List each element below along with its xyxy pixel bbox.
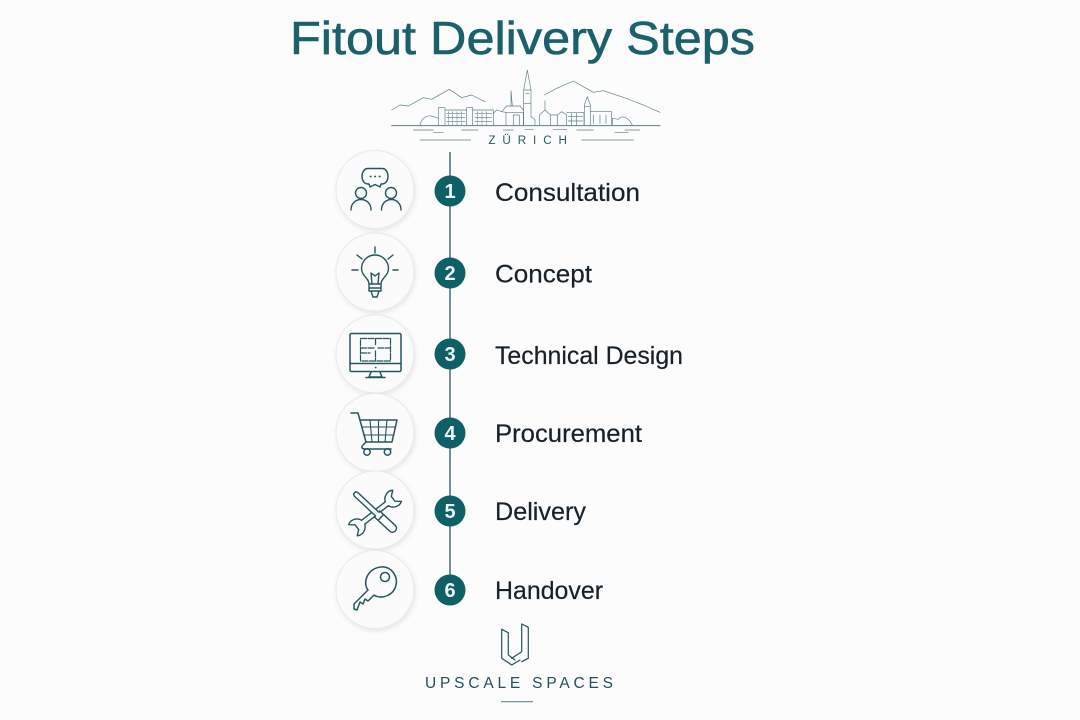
label: Technical Design <box>495 342 683 370</box>
label: Delivery <box>495 498 587 526</box>
number 4 <box>434 418 466 448</box>
label: Consultation <box>495 179 640 207</box>
logo text: UPSCALE SPACES <box>425 675 613 692</box>
number 5: 5 <box>444 501 456 523</box>
number 2 <box>434 258 466 288</box>
number 6: 6 <box>444 580 456 602</box>
number 4: 4 <box>444 423 456 445</box>
logo mark <box>502 624 528 665</box>
step 3: Technical Design <box>336 315 683 393</box>
label: Handover <box>495 577 603 605</box>
step 2: Concept <box>336 233 592 311</box>
label: Concept <box>495 260 592 288</box>
icon circle: crossed wrench and screwdriver <box>336 471 414 549</box>
icon circle: monitor with floor plan <box>336 315 414 393</box>
number 5 <box>434 496 466 526</box>
number 1: 1 <box>444 181 456 203</box>
step 1: Consultation <box>336 150 640 228</box>
number 3: 3 <box>444 344 456 366</box>
number 3 <box>434 338 466 370</box>
label: Procurement <box>495 420 642 448</box>
title: Fitout Delivery Steps <box>290 12 755 64</box>
icon: Zurich skyline: ZÜRICH <box>488 134 567 147</box>
icon: Zurich skyline <box>392 70 660 147</box>
number 6 <box>434 574 466 606</box>
icon circle: key <box>336 550 414 628</box>
icon circle: people talking <box>336 150 414 228</box>
icon circle: light bulb <box>336 233 414 311</box>
icon circle: shopping cart <box>336 394 414 472</box>
step 5: Delivery <box>336 471 587 549</box>
number 1 <box>434 176 466 206</box>
logo: Upscale Spaces <box>425 624 613 702</box>
step 6: Handover <box>336 550 603 628</box>
step 4: Procurement <box>336 394 642 472</box>
timeline line <box>449 152 451 578</box>
number 2: 2 <box>444 263 456 285</box>
